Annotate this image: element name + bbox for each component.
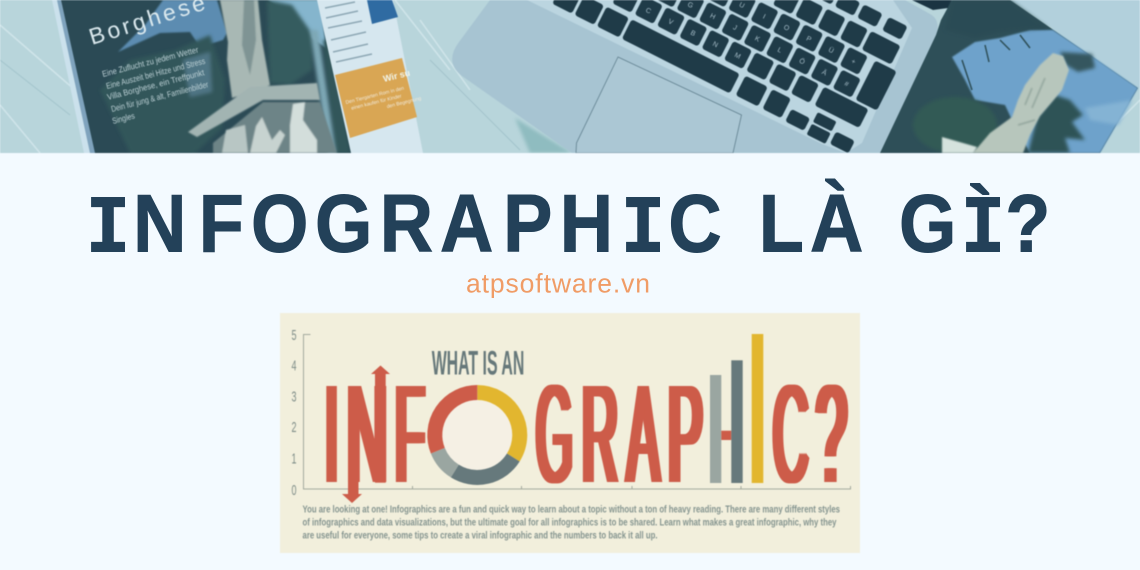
wordmark letters: A	[627, 356, 659, 512]
chart axes	[304, 334, 851, 489]
page title: ?	[1005, 177, 1050, 270]
arrow: N stem pointing down	[342, 387, 362, 503]
axis numbers: 1	[291, 450, 297, 467]
banner photo: magazines and laptop on a desk	[0, 0, 1140, 154]
page title: P	[503, 177, 552, 270]
page title: À	[810, 177, 863, 270]
card background	[280, 313, 860, 553]
magazine cover text: Eine Auszeit bei Hitze und Stress	[105, 56, 206, 91]
page title: I	[621, 184, 665, 277]
axis numbers: 0	[291, 482, 297, 499]
key labels	[644, 0, 861, 110]
wordmark letters: F	[395, 356, 425, 512]
rolled magazine	[317, 0, 423, 153]
wordmark letters: G	[536, 356, 573, 512]
magazine cover text: Dein für jung & alt, Familienbilder	[110, 79, 209, 114]
axis numbers	[291, 327, 297, 499]
page title: G	[899, 177, 956, 270]
axis numbers: 2	[291, 419, 297, 436]
page title: I	[86, 184, 130, 277]
magazine cover text: Villa Borghese, ein Treffpunkt	[106, 67, 206, 102]
magazine cover text: Singles	[111, 110, 136, 126]
description paragraph: You are looking at one! Infographics are a fun and quick way to learn about a topic without a ton of heavy reading. There are many different styles	[302, 504, 840, 516]
arrow: N stem pointing up	[371, 366, 390, 483]
chart overlay: WHAT IS AN	[432, 344, 524, 382]
page title: G	[315, 177, 372, 270]
rolled magazine: Wir su	[382, 68, 411, 84]
laptop keys	[551, 0, 917, 158]
keyboard well	[527, 0, 912, 153]
magazine cover text: Eine Zuflucht zu jedem Wetter	[101, 44, 199, 79]
magazine cover text	[101, 44, 209, 126]
description paragraph: are useful for everyone, some tips to create a viral infographic and the numbers to back it all up.	[302, 529, 658, 541]
right magazine	[880, 0, 1138, 153]
wordmark letters: ?	[816, 356, 846, 512]
page title: Ì	[961, 183, 1005, 277]
wordmark letters: C	[773, 356, 808, 512]
rolled magazine: einen kaufen für Kinder	[351, 93, 403, 112]
rolled magazine: Den Tiergarten Rom in den	[345, 86, 405, 106]
rolled magazine: den Begegnung	[386, 96, 422, 110]
phone corner	[912, 0, 952, 10]
bar chart forming letters H and I	[710, 334, 763, 483]
trackpad	[576, 57, 742, 153]
page title: F	[199, 177, 244, 270]
description paragraph	[302, 504, 840, 541]
page title: R	[380, 177, 433, 270]
page title: A	[440, 177, 493, 270]
axis numbers: 5	[291, 327, 297, 344]
left magazine	[52, 0, 353, 153]
key labels: GHJKLÖÄ#	[686, 0, 850, 89]
donut chart forming letter O	[435, 392, 520, 478]
wordmark letters: R	[582, 356, 618, 512]
desk background	[0, 0, 1140, 153]
axis numbers: 3	[291, 388, 297, 405]
wordmark letters: I	[325, 356, 338, 512]
laptop body	[452, 0, 938, 153]
subtitle: atpsoftware.vn	[466, 269, 650, 299]
wordmark letters: P	[668, 356, 703, 512]
wordmark letters: N	[347, 356, 387, 512]
page title: N	[133, 177, 186, 270]
page title: L	[759, 177, 804, 270]
key labels: CVBNM	[644, 7, 742, 61]
page title: H	[560, 177, 613, 270]
page title: O	[251, 177, 308, 270]
page title: C	[668, 177, 722, 270]
description paragraph: of infographics and data visualizations, but the ultimate goal for all infographics is to be shared. Learn what makes a great infographic, why they	[302, 516, 837, 528]
axis numbers: 4	[291, 357, 297, 374]
